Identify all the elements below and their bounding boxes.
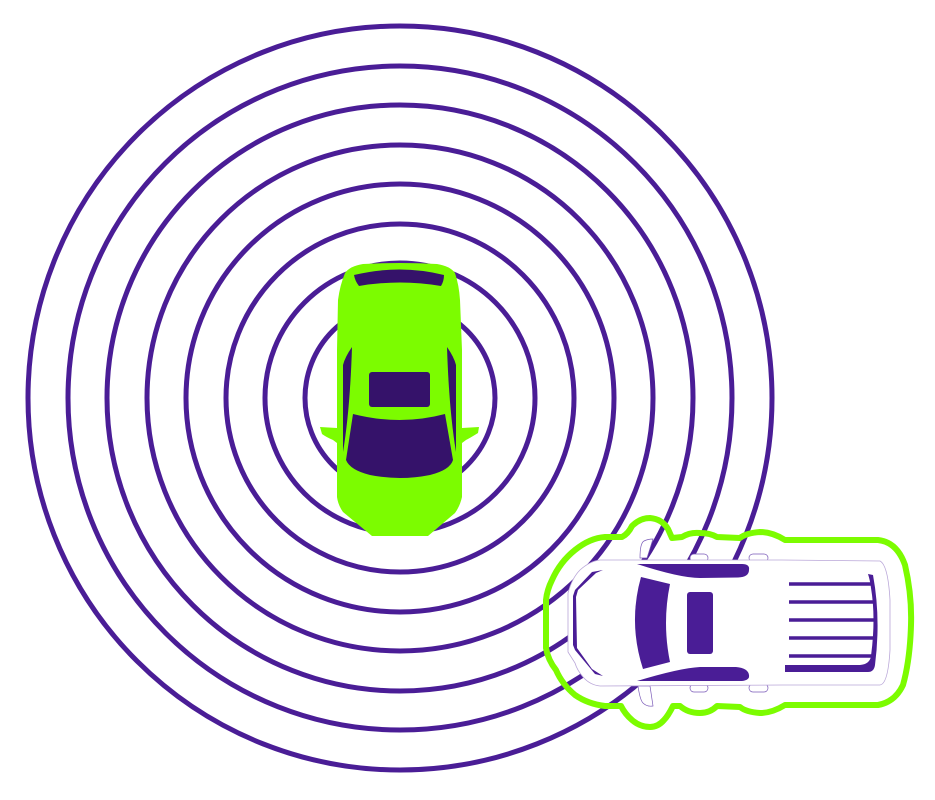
truck side mirror bottom (638, 686, 653, 706)
concentric signal rings (28, 26, 772, 770)
windshield (346, 414, 453, 478)
truck sunroof (687, 592, 713, 654)
truck side mirror top (640, 539, 653, 558)
sunroof (369, 372, 430, 407)
rear window (354, 270, 444, 286)
right side window (447, 347, 456, 452)
top side strip (637, 564, 749, 578)
bottom side strip (637, 667, 749, 681)
green car (320, 263, 479, 536)
truck windshield (635, 577, 670, 669)
white pickup truck with green outline (546, 518, 911, 727)
truck body (568, 560, 890, 686)
green glow outline (546, 518, 911, 727)
left side window (343, 347, 352, 452)
truck handles (690, 554, 768, 692)
green car body (320, 263, 479, 536)
truck bed frame (785, 574, 878, 672)
hood crease line (573, 570, 603, 676)
truck bed lines (789, 584, 874, 656)
